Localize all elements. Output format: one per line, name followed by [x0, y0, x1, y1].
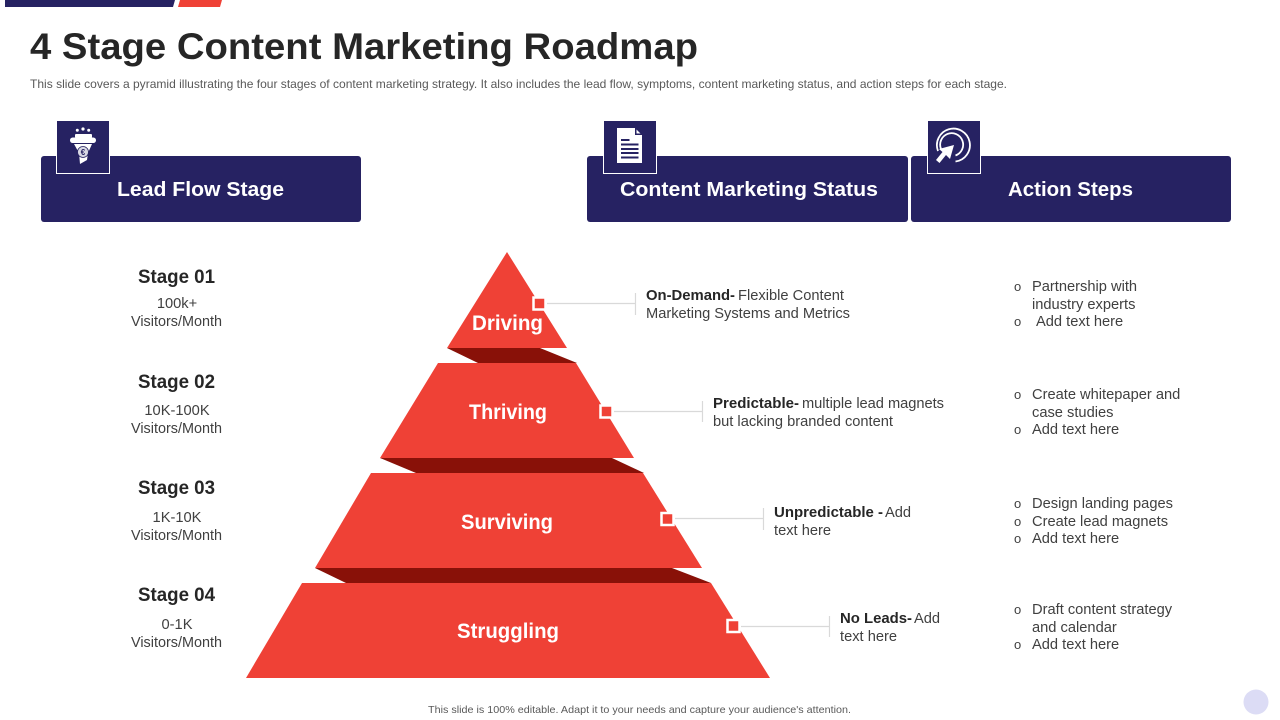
stage 02: Stage 02 [138, 372, 215, 393]
action steps: stage 04: o [1014, 637, 1021, 652]
status: on-demand [646, 288, 850, 322]
action steps: stage 02: o [1014, 422, 1021, 437]
subtitle: This slide covers a pyramid illustrating the four stages of content marketing strategy. It also includes the lead flow, symptoms, content marketing status, and action steps for each stage. [30, 77, 1007, 91]
header label: Lead Flow Stage [117, 179, 284, 201]
header: content marketing status [587, 120, 908, 222]
status: no leads [840, 611, 940, 645]
page badge [1244, 690, 1268, 714]
action steps: stage 04 [1014, 602, 1173, 653]
pyramid tier: driving [447, 252, 567, 348]
stage 03 [131, 478, 222, 544]
action steps: stage 01 [1014, 279, 1137, 330]
connector: thriving [600, 401, 702, 422]
status: on-demand: Flexible Content [738, 288, 844, 304]
header: lead flow stage [41, 120, 361, 222]
action steps: stage 01: Add text here [1036, 314, 1123, 330]
pyramid tier: struggling: Struggling [457, 620, 559, 643]
icon: funnel [56, 120, 110, 174]
stage 03: Visitors/Month [131, 528, 222, 544]
stage 01 [131, 267, 222, 330]
stage 01: Visitors/Month [131, 314, 222, 330]
status: unpredictable: Add [885, 505, 911, 521]
status: unpredictable: text here [774, 523, 831, 539]
action steps: stage 03: o [1014, 514, 1021, 529]
action steps: stage 01: Partnership with [1032, 279, 1137, 295]
action steps: stage 03: o [1014, 531, 1021, 546]
pyramid tier: surviving: Surviving [461, 511, 553, 534]
connector: driving [534, 293, 636, 315]
header label: Action Steps [1008, 179, 1133, 201]
status: predictable: multiple lead magnets [802, 396, 944, 412]
status: no leads: text here [840, 629, 897, 645]
action steps: stage 02: o [1014, 387, 1021, 402]
status: predictable: Predictable- [713, 396, 799, 412]
stage 04 [131, 585, 222, 651]
action steps: stage 02 [1014, 387, 1180, 438]
stage 04: 0-1K [162, 617, 193, 633]
icon: document [604, 120, 656, 174]
status: unpredictable: Unpredictable - [774, 505, 883, 521]
stage 02 [131, 372, 222, 437]
title: 4 Stage Content Marketing Roadmap [30, 26, 698, 67]
action steps: stage 04: Draft content strategy [1032, 602, 1173, 618]
action steps: stage 01: o [1014, 314, 1021, 329]
icon: target with arrow [928, 120, 980, 174]
action steps: stage 03: Create lead magnets [1032, 514, 1168, 530]
pyramid [246, 252, 770, 678]
connector: surviving [662, 508, 764, 530]
action steps: stage 01: industry experts [1032, 297, 1135, 313]
icon: funnel: € [81, 148, 86, 157]
action steps: stage 04: and calendar [1032, 620, 1117, 636]
connector: struggling [728, 616, 830, 637]
status: on-demand: On-Demand- [646, 288, 735, 304]
status: on-demand: Marketing Systems and Metrics [646, 306, 850, 322]
stage 04: Visitors/Month [131, 635, 222, 651]
stage 04: Stage 04 [138, 585, 215, 606]
stage 01: Stage 01 [138, 267, 215, 288]
status: predictable [713, 396, 944, 430]
top accent bars [5, 0, 222, 7]
header: action steps [911, 120, 1231, 222]
action steps: stage 03: Add text here [1032, 531, 1119, 547]
pyramid tier: surviving [315, 473, 702, 568]
pyramid tier: struggling [246, 583, 770, 678]
stage 02: Visitors/Month [131, 421, 222, 437]
stage 01: 100k+ [157, 296, 197, 312]
action steps: stage 02: Add text here [1032, 422, 1119, 438]
header label: Content Marketing Status [620, 179, 878, 201]
status: no leads: Add [914, 611, 940, 627]
pyramid tier: thriving: Thriving [469, 401, 547, 424]
action steps: stage 02: case studies [1032, 405, 1113, 421]
action steps: stage 03: Design landing pages [1032, 496, 1173, 512]
action steps: stage 04: Add text here [1032, 637, 1119, 653]
pyramid tier: thriving [380, 363, 634, 458]
action steps: stage 03 [1014, 496, 1173, 547]
action steps: stage 03: o [1014, 496, 1021, 511]
action steps: stage 02: Create whitepaper and [1032, 387, 1180, 403]
footer note: This slide is 100% editable. Adapt it to your needs and capture your audience's attention. [428, 704, 851, 716]
pyramid tier: driving: Driving [472, 312, 543, 335]
status: unpredictable [774, 505, 911, 539]
action steps: stage 01: o [1014, 279, 1021, 294]
stage 02: 10K-100K [144, 403, 210, 419]
status: no leads: No Leads- [840, 611, 912, 627]
status: predictable: but lacking branded content [713, 414, 893, 430]
stage 03: 1K-10K [153, 510, 202, 526]
action steps: stage 04: o [1014, 602, 1021, 617]
stage 03: Stage 03 [138, 478, 215, 499]
